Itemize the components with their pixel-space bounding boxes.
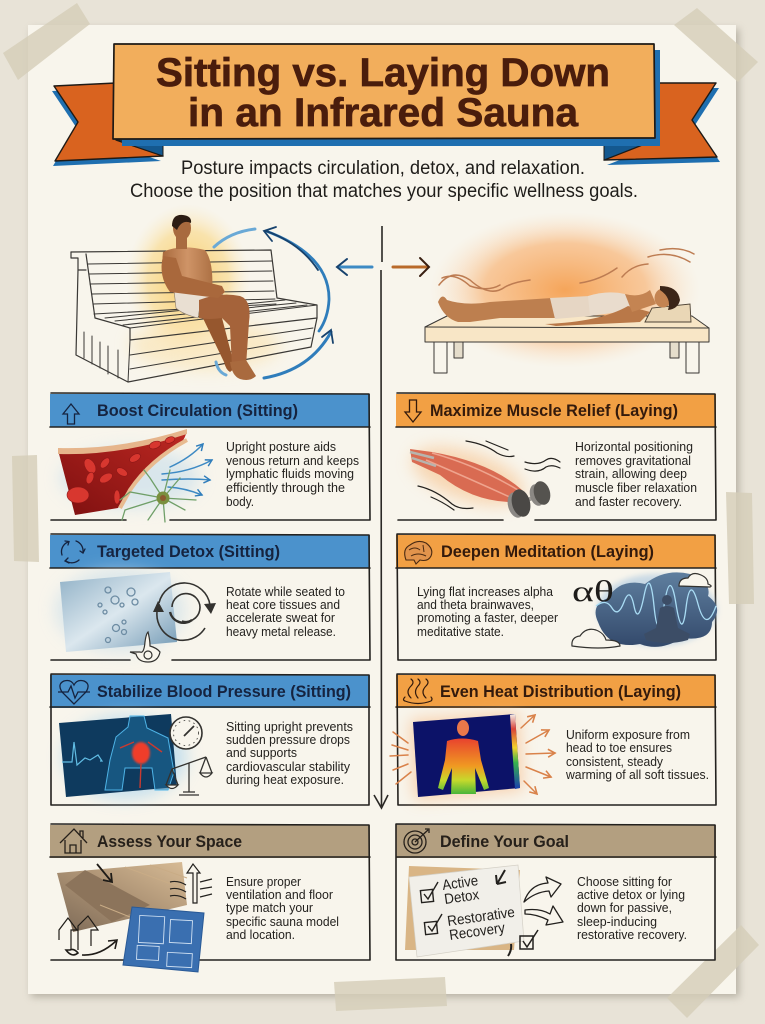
text block: sleep-inducing (577, 914, 657, 929)
icon: up arrow (63, 404, 79, 424)
header: Assess Your Space: Assess Your Space (97, 833, 242, 851)
text block: Rotate while seated to (226, 584, 345, 599)
arm (162, 256, 225, 298)
text block: removes gravitational (575, 453, 691, 468)
illustration: thermal body scan (390, 712, 555, 800)
header: Deepen Meditation: Deepen Meditation (Laying) (441, 543, 654, 561)
header: Stabilize Blood Pressure: Stabilize Blood Pressure (Sitting) (97, 683, 351, 701)
header: Deepen Meditation (396, 535, 716, 568)
doodle clouds (572, 574, 711, 648)
header: Targeted Detox (50, 535, 370, 568)
header: Maximize Muscle Relief: Maximize Muscle Relief (Laying) (430, 402, 678, 420)
seated man (162, 215, 256, 380)
arrow: right to laying (393, 258, 429, 276)
text block: Sitting upright prevents (226, 719, 353, 734)
text block: restorative recovery. (577, 927, 687, 942)
card: Targeted Detox (50, 534, 370, 662)
text block: warming of all soft tissues. (565, 767, 709, 782)
text block: Choose sitting for (577, 874, 673, 889)
blueprint (123, 907, 204, 972)
circulation arrows (214, 227, 333, 378)
curved arrows (524, 877, 563, 925)
card: Even Heat Distribution (390, 674, 716, 805)
icon: balance scale (166, 757, 212, 795)
text block: strain, allowing deep (575, 466, 687, 481)
card: Stabilize Blood Pressure (50, 674, 370, 805)
heat waves (439, 249, 694, 291)
illustration: muscle and dumbbell (405, 435, 560, 520)
text block: and faster recovery. (575, 494, 682, 509)
title text (156, 51, 610, 135)
illustration: laying on sauna platform (393, 212, 709, 373)
illustration: meditation cloud (572, 572, 717, 648)
note labels: Active (441, 873, 479, 894)
text block: during heat exposure. (226, 772, 344, 787)
text block: muscle fiber relaxation (575, 480, 697, 495)
text block: lymphatic fluids moving (226, 466, 354, 481)
text block: and supports (226, 745, 297, 760)
header: Boost Circulation (50, 394, 370, 427)
header: Even Heat Distribution (396, 675, 716, 708)
text block: consistent, steady (566, 754, 663, 769)
platform (425, 316, 709, 373)
text block: heat core tissues and (226, 597, 340, 612)
note labels: Restorative (446, 905, 516, 930)
towel (174, 284, 224, 318)
meditating figure (644, 595, 690, 643)
text block: Lying flat increases alpha (417, 584, 554, 599)
title banner (52, 44, 720, 166)
header: Assess Your Space (50, 825, 370, 858)
text block (577, 874, 687, 942)
illustration: blood vessel and neuron (58, 429, 212, 522)
text block (417, 584, 559, 639)
text block: promoting a faster, deeper (417, 610, 559, 625)
card: Define Your Goal (396, 824, 716, 960)
neck (176, 236, 187, 249)
subtitle (130, 158, 638, 202)
text block: accelerate sweat for (226, 610, 336, 625)
card: Maximize Muscle Relief (396, 393, 716, 520)
icon: heart with pulse (58, 680, 90, 704)
neuron (120, 470, 196, 522)
text block: type match your (226, 900, 314, 915)
thermal body (438, 720, 489, 794)
illustration: checklist note (405, 865, 563, 957)
wooden bench (71, 250, 317, 382)
dumbbell (505, 479, 553, 520)
text block: meditative state. (417, 624, 504, 639)
small checkbox (508, 930, 538, 956)
icon: brain (405, 541, 432, 564)
text block: down for passive, (577, 900, 672, 915)
text block: Upright posture aids (226, 439, 336, 454)
heat arrows (521, 715, 555, 794)
note labels: Detox (443, 887, 481, 908)
reclining woman (438, 286, 691, 326)
text block: cardiovascular stability (226, 759, 350, 774)
header: Boost Circulation: Boost Circulation (Sitting) (97, 402, 298, 420)
icon: down arrow (405, 400, 421, 422)
near thigh and shin (199, 295, 250, 368)
heat glow (430, 212, 700, 368)
title text: Sitting vs. Laying Down (156, 51, 610, 95)
sweat pore (130, 632, 160, 662)
text block (226, 719, 353, 787)
icon: gauge (170, 717, 202, 749)
icon: cycle arrows (61, 541, 85, 563)
text block: and theta brainwaves, (417, 597, 534, 612)
head (173, 216, 191, 240)
greek letters: αθ (572, 575, 614, 608)
warm glow behind sitter (126, 204, 250, 356)
text block: active detox or lying (577, 887, 685, 902)
text block: Horizontal positioning (575, 439, 693, 454)
banner ribbon tails (52, 83, 720, 166)
subtitle: Choose the position that matches your specific wellness goals. (130, 181, 638, 202)
text block: specific sauna model (226, 914, 339, 929)
note labels (441, 873, 516, 944)
illustration: sitting on sauna bench (71, 204, 372, 382)
text block: ventilation and floor (226, 887, 334, 902)
text block: Uniform exposure from (566, 727, 690, 742)
text block: and location. (226, 927, 295, 942)
feet (230, 360, 256, 380)
title text: in an Infrared Sauna (188, 91, 579, 135)
illustration: heart anatomy (59, 714, 187, 799)
text block: head to toe ensures (566, 740, 672, 755)
center divider with arrow (374, 226, 388, 808)
card: Boost Circulation (50, 393, 370, 522)
text block: body. (226, 494, 254, 509)
header: Define Your Goal: Define Your Goal (440, 833, 569, 851)
icon: target (404, 829, 429, 853)
text block (226, 874, 339, 942)
icon: steam bowl (404, 679, 432, 704)
arrow: left to sitting (337, 259, 372, 275)
text block (575, 439, 697, 509)
far leg (200, 312, 235, 372)
header: Maximize Muscle Relief (396, 394, 716, 427)
header: Targeted Detox: Targeted Detox (Sitting) (97, 543, 280, 561)
illustration: sweat droplets and rotation (55, 568, 216, 662)
text block: venous return and keeps (226, 453, 359, 468)
text block (565, 727, 709, 782)
header: Define Your Goal (396, 825, 716, 858)
text block (226, 584, 345, 639)
illustration: floor and blueprint (57, 862, 212, 972)
text block: efficiently through the (226, 480, 345, 495)
text block: Ensure proper (226, 874, 302, 889)
note labels: Recovery (448, 920, 507, 944)
text block: sudden pressure drops (226, 732, 350, 747)
card: Deepen Meditation (396, 534, 717, 660)
text block: heavy metal release. (226, 624, 336, 639)
card: Assess Your Space (50, 824, 370, 972)
header: Stabilize Blood Pressure (50, 675, 370, 708)
subtitle: Posture impacts circulation, detox, and relaxation. (181, 158, 585, 179)
header: Even Heat Distribution: Even Heat Distribution (Laying) (440, 683, 681, 701)
torso (163, 247, 212, 296)
icon: house (60, 829, 87, 853)
text block (226, 439, 359, 509)
